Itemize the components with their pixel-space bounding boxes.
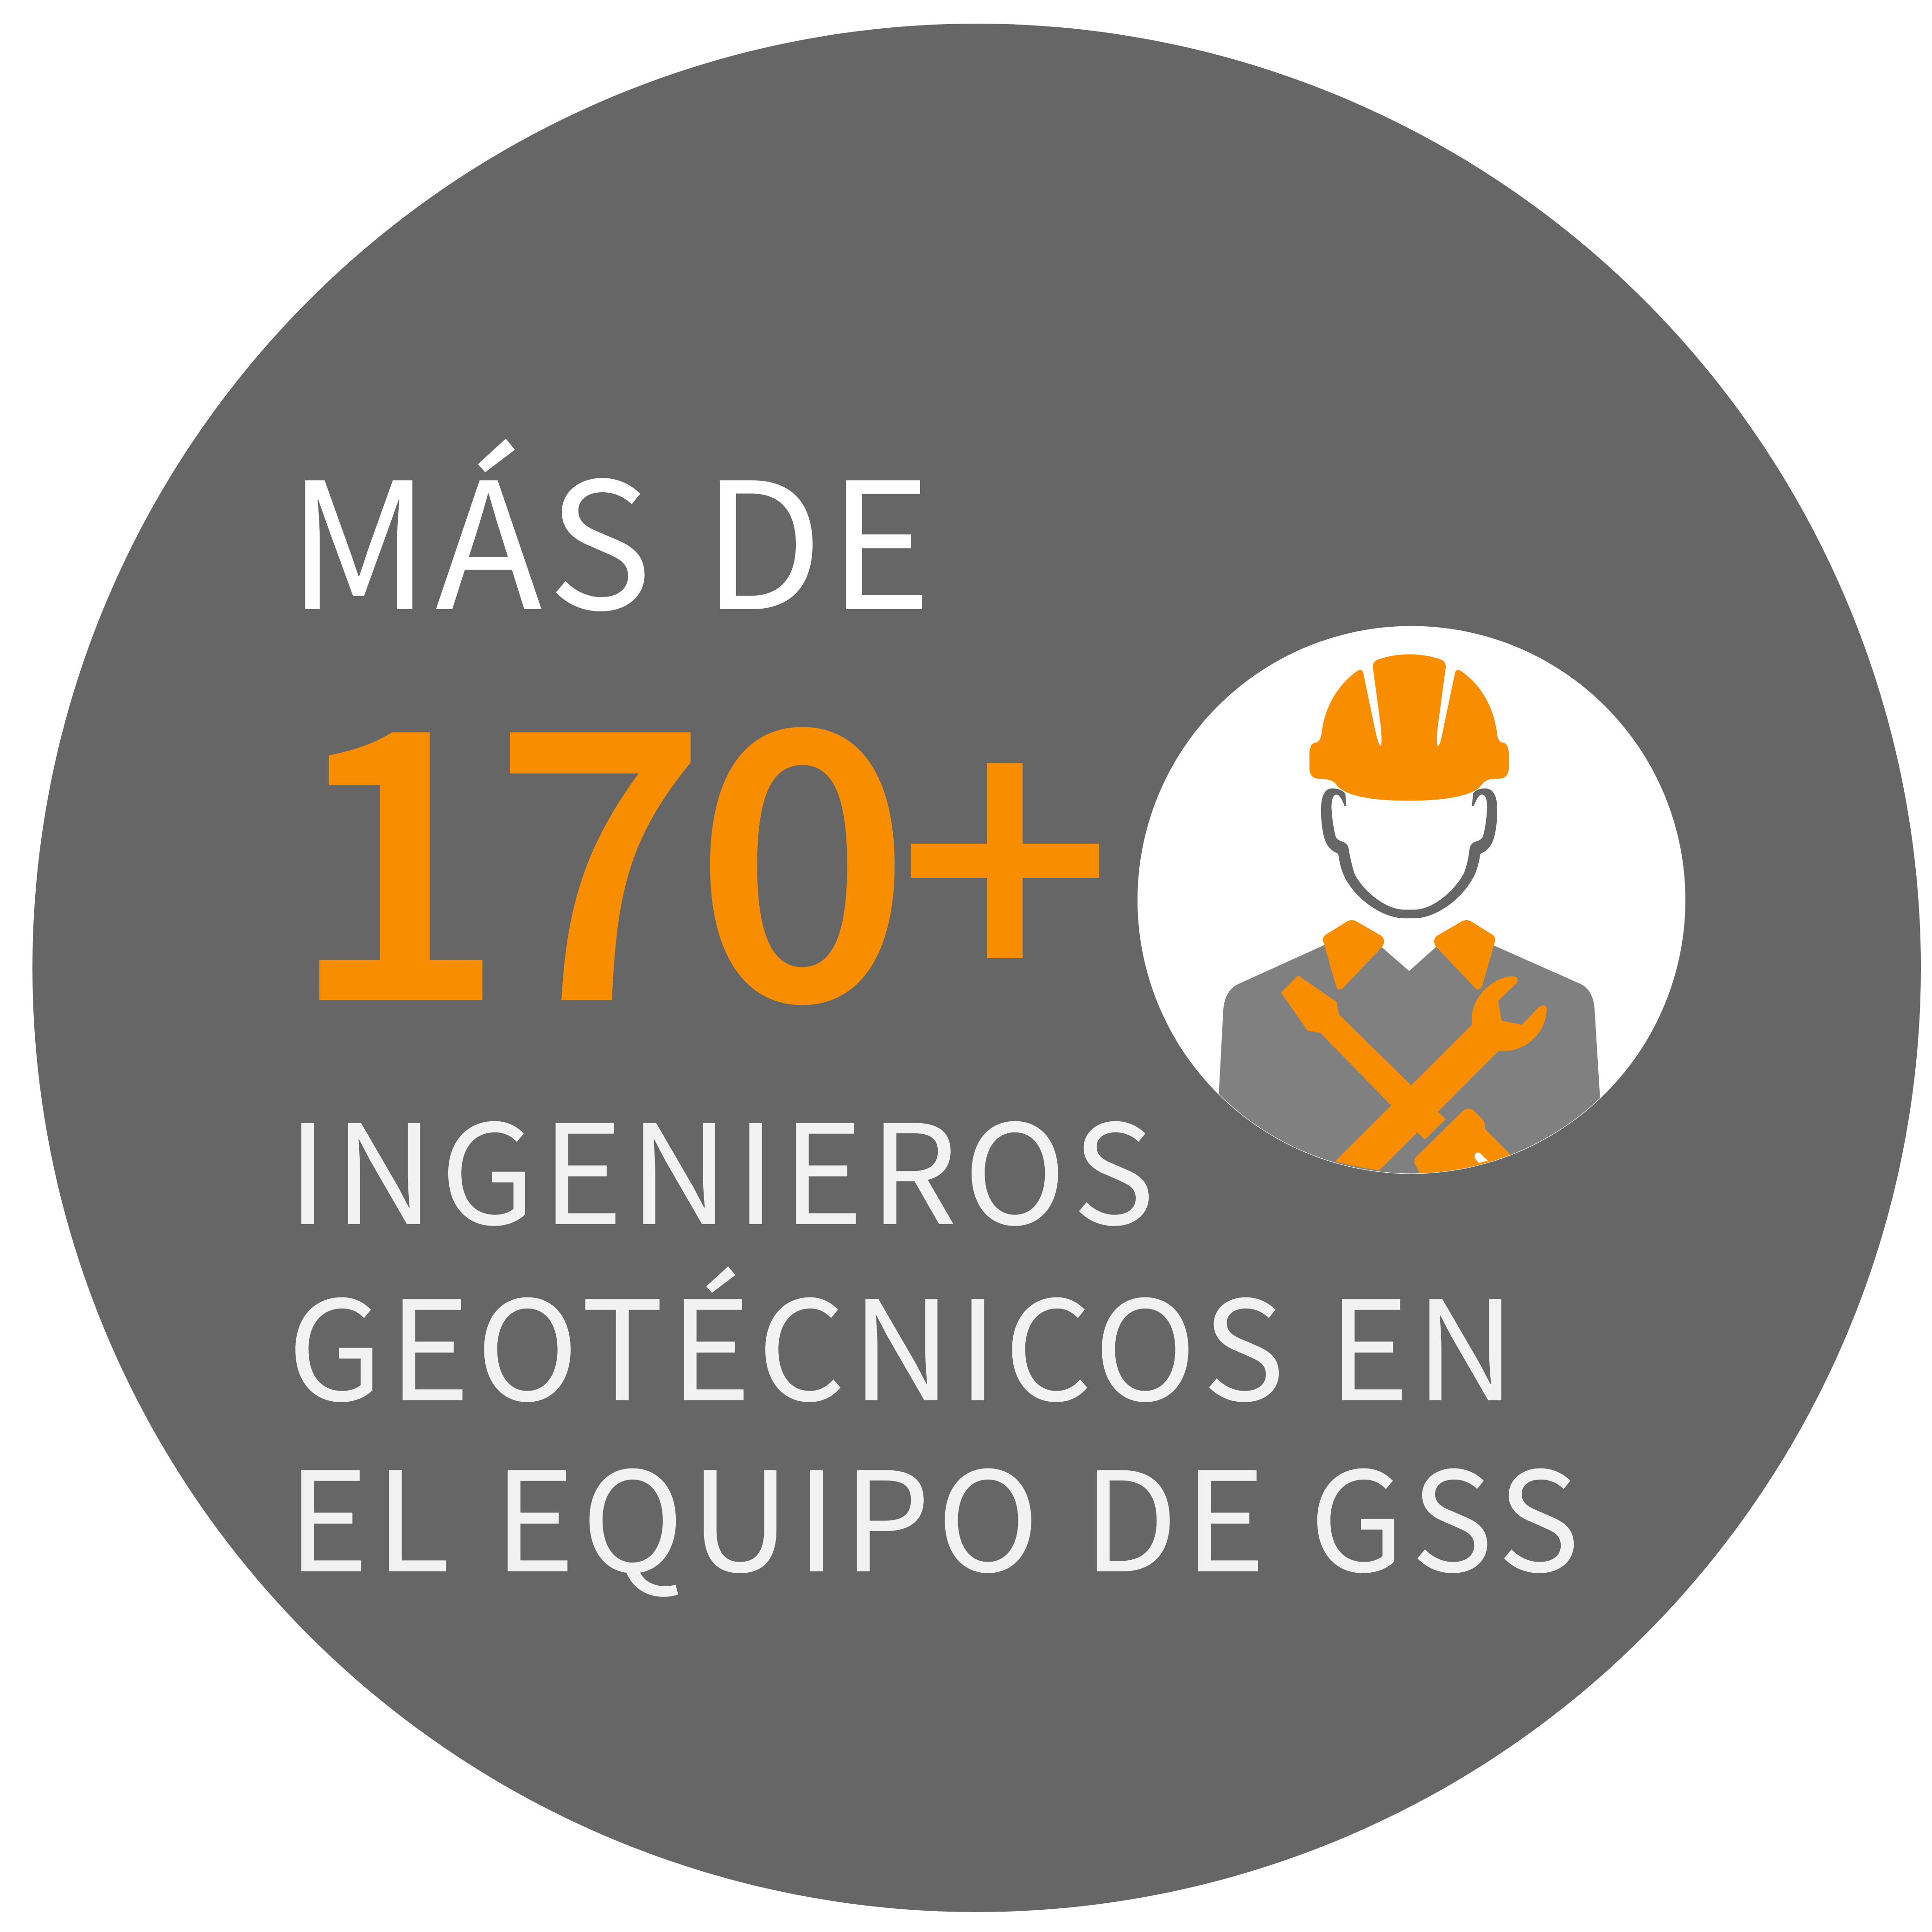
icon: head outline	[1321, 788, 1497, 918]
text block: ingenieros geotécnicos en el equipo de GSS: EL EQUIPO DE GSS	[287, 1411, 1580, 1611]
icon: wrench	[1335, 976, 1547, 1170]
big number: 170+: 170+	[286, 564, 1117, 1112]
heading: más de: MÁS DE	[287, 406, 932, 660]
icon: screwdriver shaft	[1281, 975, 1446, 1140]
icon: shirt	[1219, 945, 1600, 1198]
icon: engineer badge	[1138, 626, 1685, 1198]
text block: ingenieros geotécnicos en el equipo de GSS: GEOTÉCNICOS EN	[287, 1240, 1515, 1440]
icon: left collar	[1323, 920, 1384, 990]
icon: screwdriver handle	[1414, 1109, 1510, 1174]
text block: ingenieros geotécnicos en el equipo de GSS: INGENIEROS	[287, 1064, 1155, 1264]
text block: ingenieros geotécnicos en el equipo de GSS	[287, 1064, 1580, 1611]
icon: hard hat	[1309, 655, 1509, 801]
icon: handle hole	[1474, 1152, 1488, 1163]
icon: right collar	[1434, 920, 1495, 990]
